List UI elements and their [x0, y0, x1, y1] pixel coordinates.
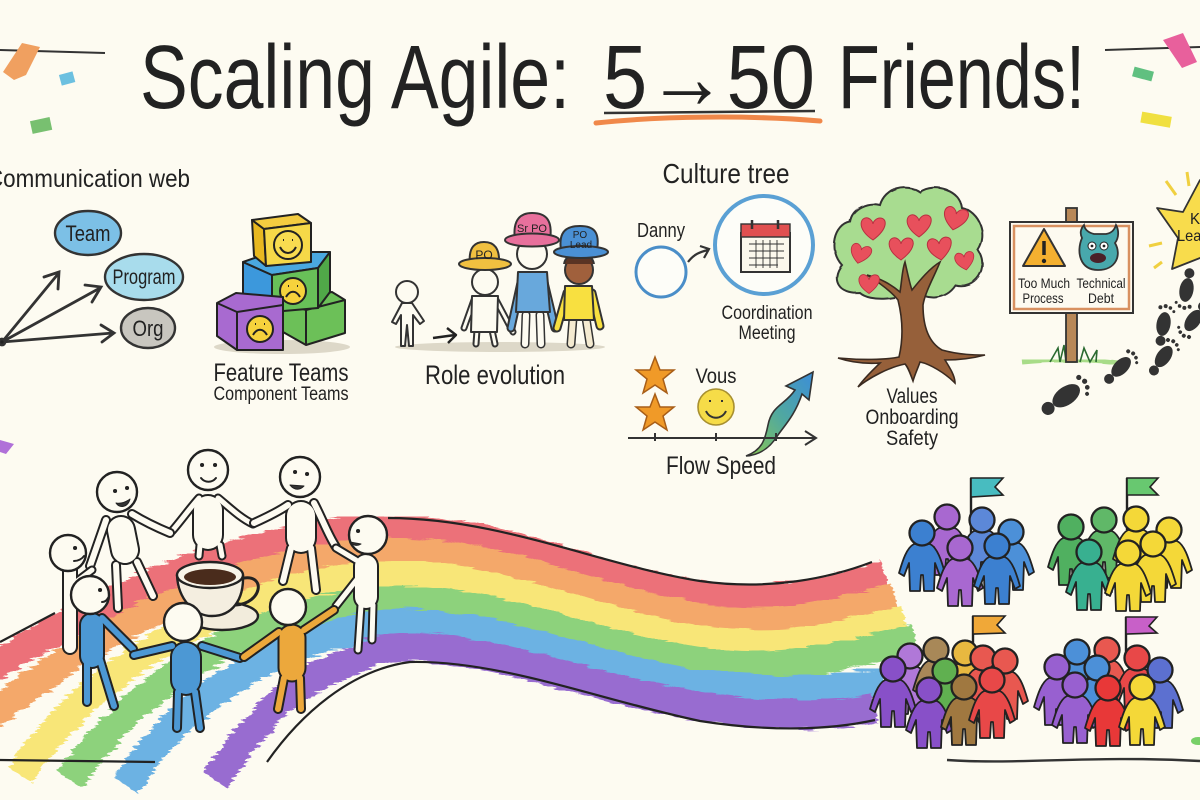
friend: orange — [244, 589, 334, 709]
figure: PO: PO — [475, 248, 493, 262]
rising arrow — [746, 372, 813, 456]
chart: flowing rainbow — [0, 530, 915, 785]
rainbow outlines — [0, 518, 875, 762]
block: purple sad — [217, 293, 283, 350]
label: coordination meeting — [722, 303, 812, 344]
icon: smiley — [698, 389, 734, 425]
panel: warning sign — [1010, 208, 1133, 364]
label: coordination meeting: Coordination — [722, 303, 812, 324]
axis — [628, 431, 816, 445]
label: values, onboarding, safety: Onboarding — [866, 406, 958, 429]
team people — [899, 504, 1034, 606]
icon: footprints trail — [1037, 267, 1200, 422]
arrow to meeting — [688, 246, 709, 262]
flag: green — [1127, 478, 1158, 530]
caption: role evolution: Role evolution — [425, 360, 565, 390]
flag: magenta — [1126, 617, 1157, 655]
panel: tree with hearts — [834, 187, 985, 450]
label: too much process — [1018, 275, 1070, 306]
stars — [636, 357, 674, 430]
friend: top — [172, 450, 253, 556]
node: org: Org — [132, 316, 164, 341]
crowd group: orange flag — [870, 616, 1028, 748]
title — [140, 28, 1085, 128]
title: Friends! — [838, 28, 1085, 128]
figure: Sr PO — [505, 213, 559, 344]
figure: Sr PO: Sr PO — [517, 223, 547, 235]
friend: upper left — [90, 472, 170, 608]
label: flow speed: Flow Speed — [666, 452, 776, 480]
figure: PO Lead: Lead — [570, 240, 592, 251]
caption: feature teams and component teams: Feature Teams — [214, 359, 348, 387]
node: program: Program — [112, 266, 176, 289]
arrow: growth — [433, 328, 456, 343]
friend: small left — [50, 535, 92, 647]
figure: PO — [459, 242, 513, 344]
flag: teal — [971, 478, 1003, 535]
panel: communication web — [0, 165, 190, 348]
block: green right — [283, 292, 345, 345]
figure: PO Lead: PO — [573, 230, 587, 241]
icon: warning triangle — [1023, 229, 1065, 266]
panel: role evolution — [392, 213, 608, 352]
board — [1010, 222, 1133, 313]
label: danny: Danny — [637, 220, 685, 242]
panel: stacked team blocks — [214, 214, 350, 354]
friend: blue left — [71, 576, 133, 706]
panel: flow speed chart — [628, 357, 816, 480]
small circle — [636, 247, 686, 297]
block: middle blue and green sad — [243, 252, 330, 312]
crowd group: teal flag — [899, 478, 1034, 606]
label: values, onboarding, safety: Values — [886, 385, 938, 408]
post — [1066, 208, 1077, 362]
trunk and roots — [838, 262, 985, 387]
canopy — [834, 187, 982, 299]
label: values, onboarding, safety — [866, 385, 958, 450]
flag: orange — [973, 616, 1005, 660]
label: technical debt: Debt — [1088, 290, 1114, 306]
team people — [1034, 638, 1183, 746]
node: team: Team — [66, 221, 110, 246]
team people — [870, 638, 1028, 748]
title: 5→50 — [603, 28, 815, 128]
icon: calendar — [741, 220, 790, 272]
caption: feature teams and component teams: Component Teams — [214, 384, 348, 405]
caption: feature teams and component teams — [214, 359, 348, 405]
grass — [1022, 345, 1125, 364]
icon: monster — [1079, 225, 1118, 270]
panel: culture tree heading and meeting — [636, 158, 813, 344]
figure: small person — [392, 281, 424, 346]
heading: culture tree: Culture tree — [662, 158, 790, 189]
label: too much process: Process — [1022, 290, 1064, 306]
node: program — [105, 254, 183, 300]
big circle — [715, 196, 813, 294]
figure: PO Lead — [554, 226, 608, 344]
hearts — [848, 206, 976, 294]
friend: upper right — [254, 457, 336, 590]
decoration: confetti and top lines — [0, 33, 1200, 454]
label: values, onboarding, safety: Safety — [886, 427, 938, 450]
icon: coffee cup — [177, 562, 258, 630]
label: vous: Vous — [696, 365, 736, 388]
decoration: ground line — [947, 737, 1200, 761]
block: yellow smile — [252, 214, 311, 266]
node: team — [55, 211, 121, 255]
label: coordination meeting: Meeting — [738, 323, 796, 344]
label: too much process: Too Much — [1018, 275, 1070, 291]
icon: key learnings star — [1149, 172, 1200, 270]
crowd group: magenta flag — [1034, 617, 1183, 746]
friend: blue center — [134, 603, 240, 728]
team people — [1048, 506, 1192, 611]
title: Scaling Agile: — [140, 28, 570, 128]
friend: right — [336, 516, 387, 650]
label: technical debt: Technical — [1076, 275, 1126, 291]
label: technical debt — [1076, 275, 1126, 306]
node: org — [121, 308, 175, 348]
crowd group: green flag — [1048, 478, 1192, 611]
group: friends holding hands around coffee — [50, 450, 387, 728]
arrows from origin to levels — [0, 272, 114, 345]
